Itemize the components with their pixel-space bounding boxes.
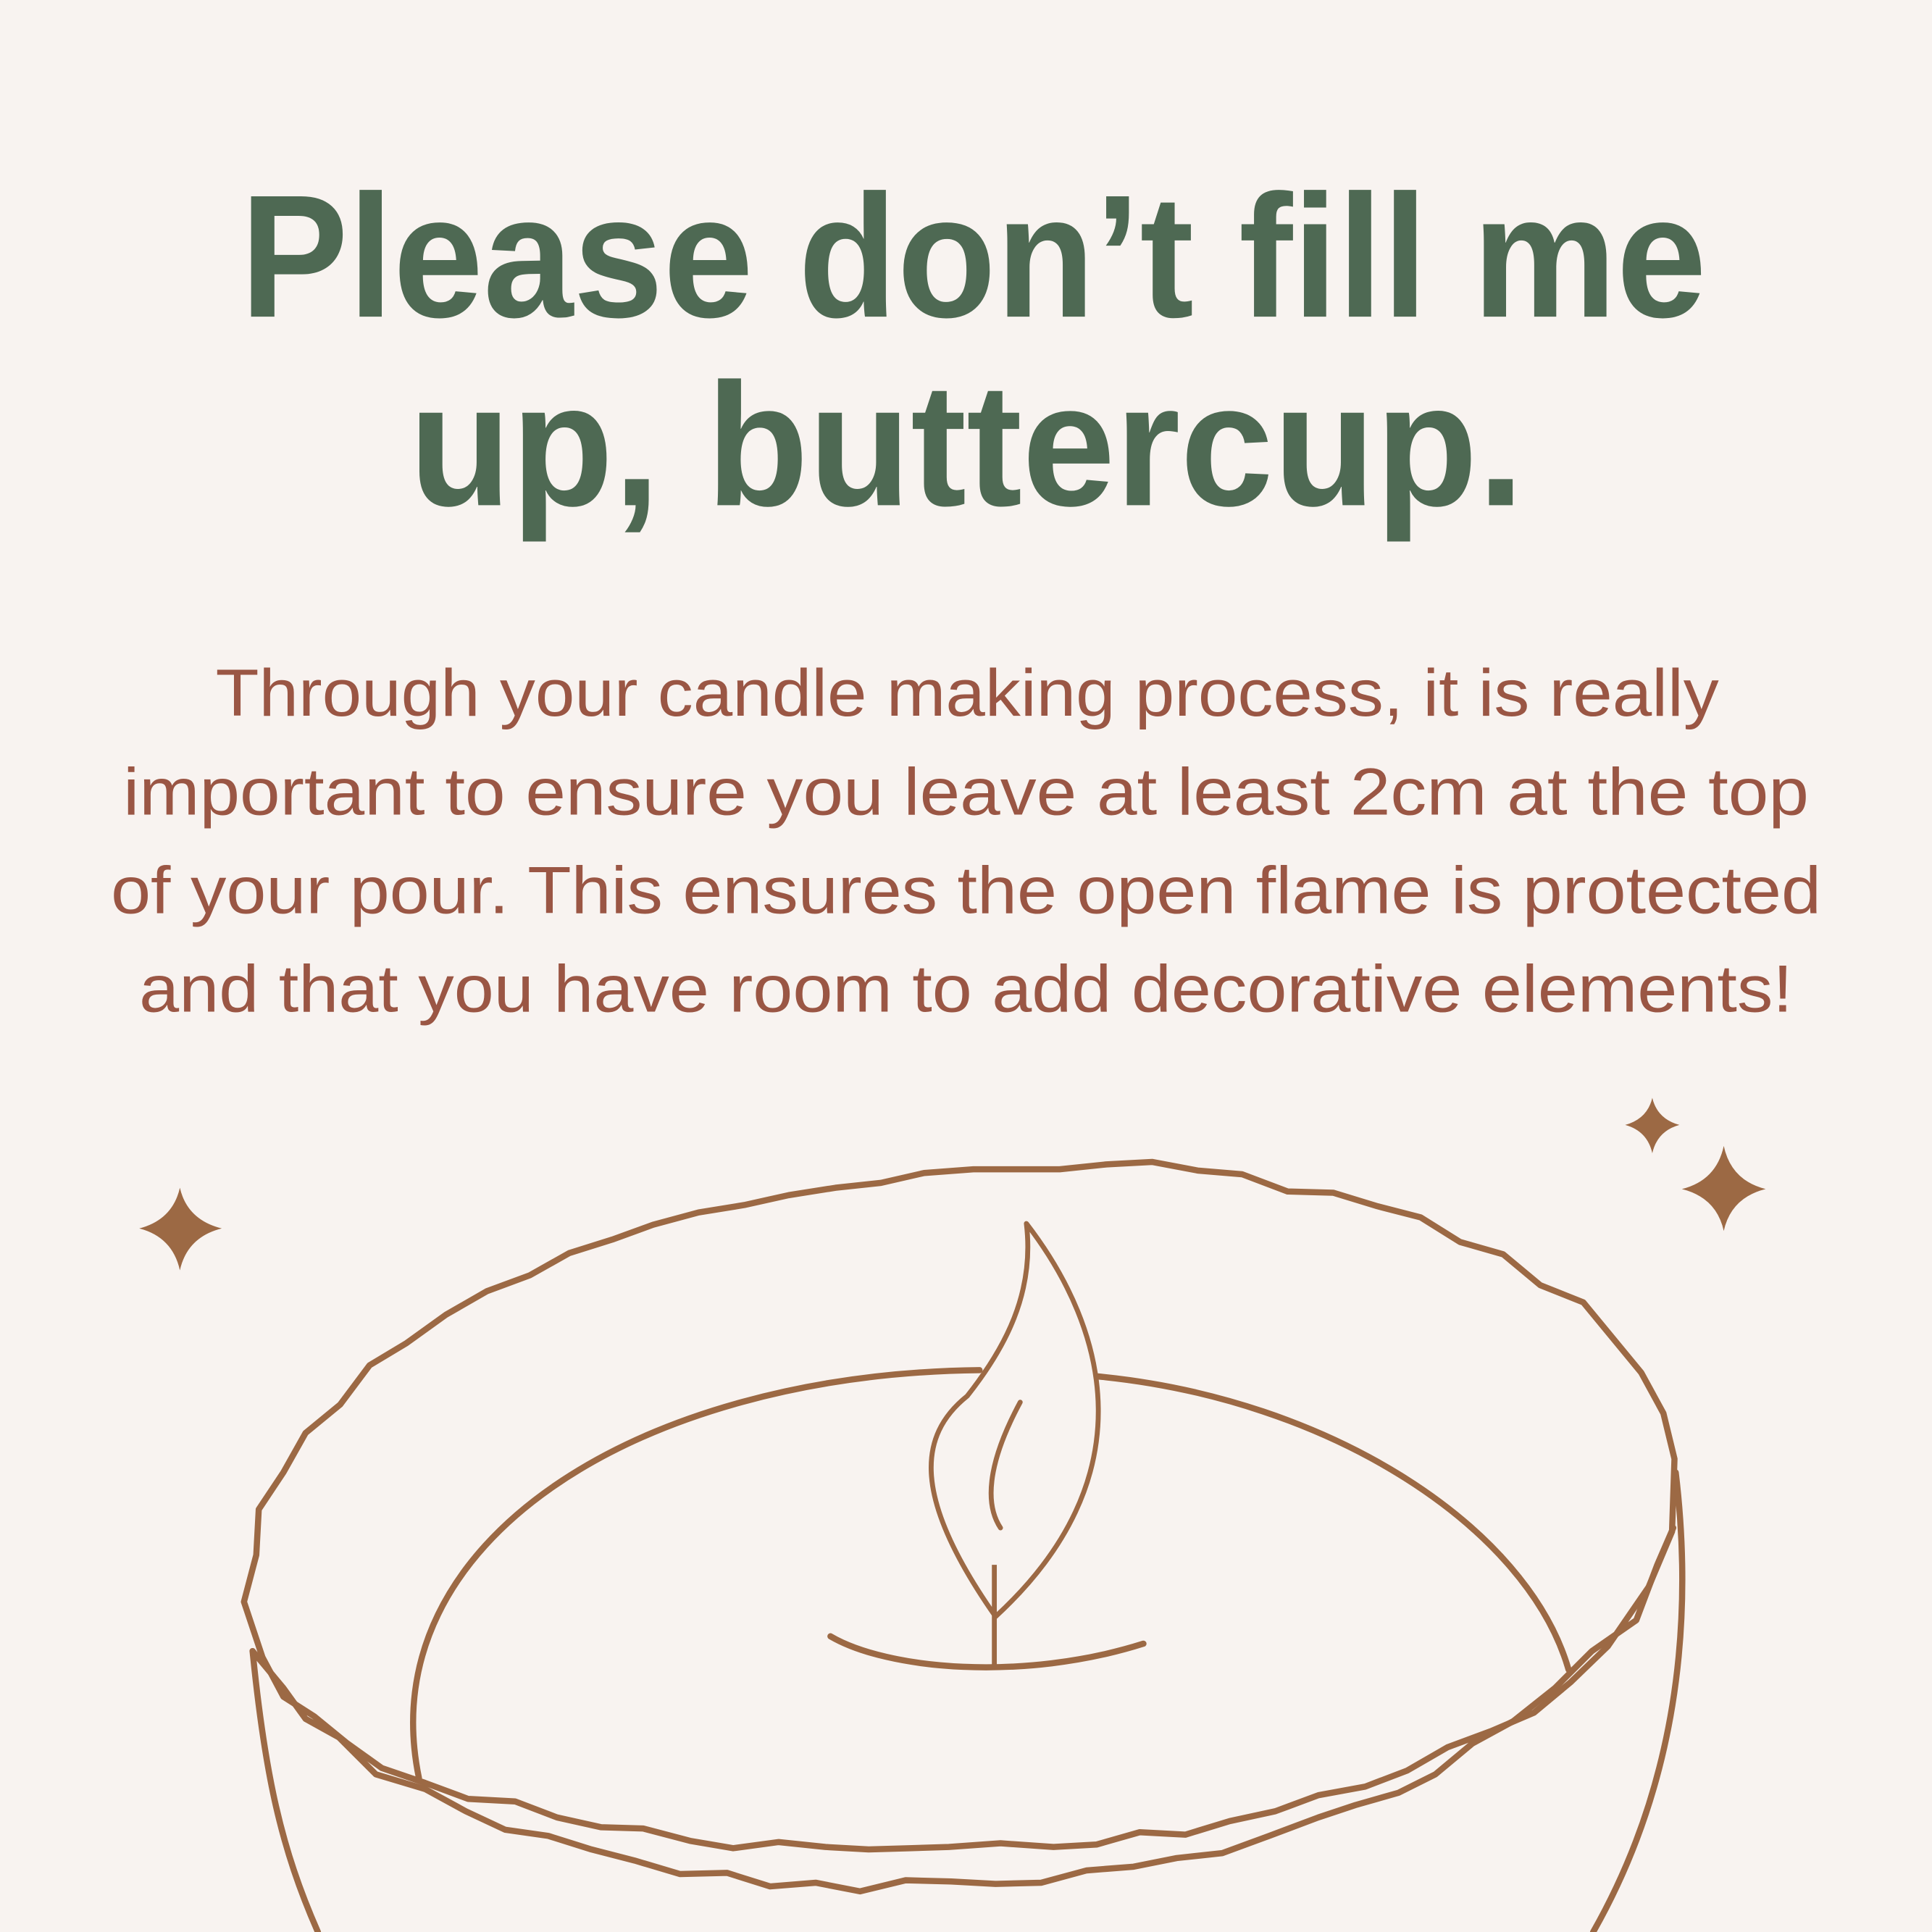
body text: Through your candle making process, it is really [216, 656, 1719, 730]
body text: of your pour. This ensures the open flame is protected [111, 853, 1821, 927]
body text: and that you have room to add decorative elements! [139, 952, 1793, 1026]
title [241, 159, 1707, 543]
title: up, buttercup. [409, 347, 1524, 543]
title: Please don’t fill me [241, 159, 1707, 354]
icon: sparkle right small [1625, 1097, 1679, 1153]
body text [111, 656, 1821, 1026]
body text: important to ensure you leave at least 2cm at the top [123, 755, 1809, 829]
flame [931, 1224, 1098, 1617]
icon: sparkle right large [1682, 1146, 1765, 1231]
icon: sparkle left [139, 1188, 222, 1271]
candle illustration [244, 1162, 1682, 1932]
